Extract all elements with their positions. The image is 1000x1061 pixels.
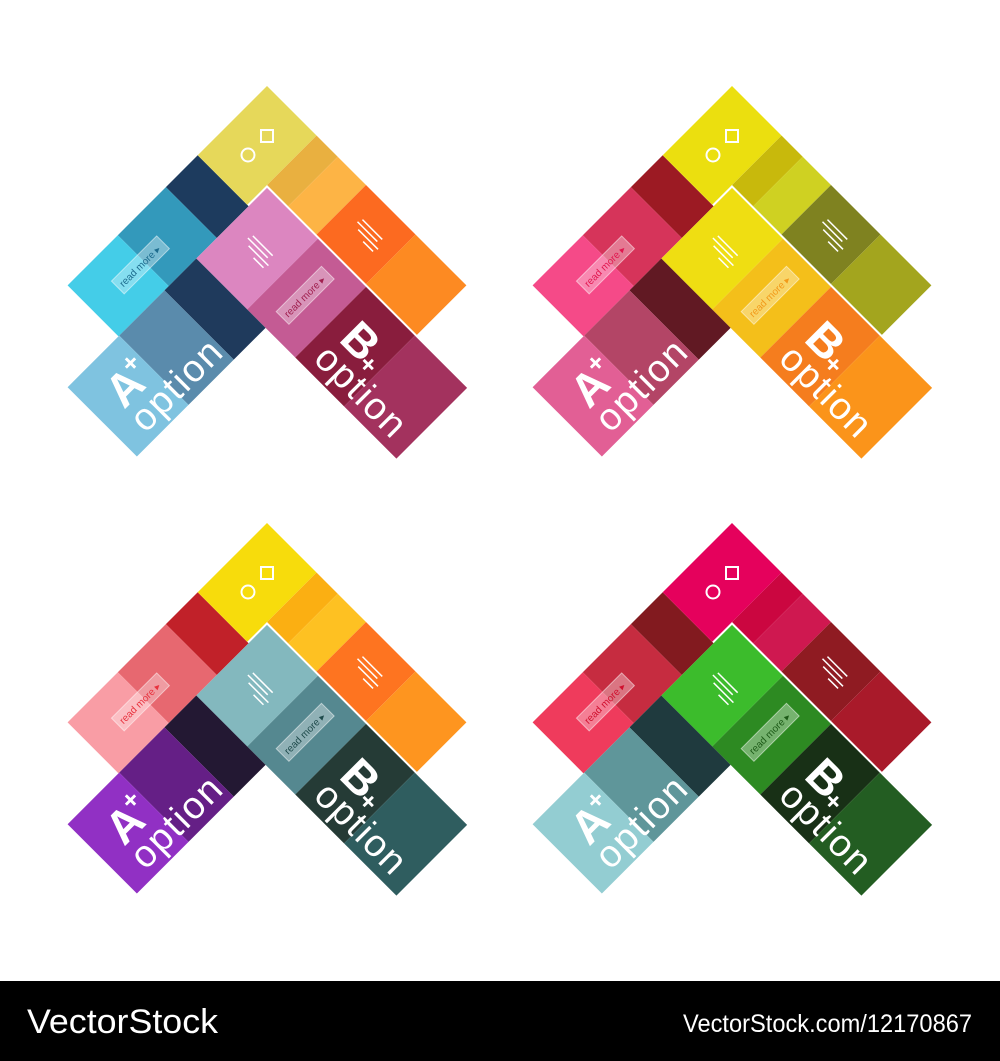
A option text [92,301,231,440]
read more button left: read more ▸ [583,244,628,290]
A option text: option [122,331,231,440]
B option text: B [331,748,391,808]
panel: bottom-right arrow (red/green/teal) [482,523,983,1024]
read more button B [276,703,334,761]
read more button B: read more ▸ [283,712,328,757]
A option text: option [587,768,696,877]
yellow top square [198,523,316,642]
read more button left: read more ▸ [118,244,163,290]
left arm cells [68,592,249,773]
A option text: + [579,784,611,816]
B band [661,188,932,459]
panel: bottom-left arrow (purple/teal/orange) [17,523,518,1024]
footer bar [0,981,1000,1061]
read more button left [576,673,634,731]
icon: lines on B1 [241,234,275,269]
icon: lines on R3 [815,655,850,690]
read more button left [111,673,169,731]
B option text: B [796,748,856,808]
A option text: A [94,794,155,854]
A option text [557,301,696,440]
right arm cells [732,135,931,335]
A option text: + [579,347,611,379]
left arm cells [533,155,714,336]
A band [68,696,266,894]
read more button B [741,703,799,761]
icon: circle and square [242,567,273,598]
B option text: + [353,348,385,380]
icon: circle and square [242,130,273,162]
B option text: option [306,337,415,446]
B band [196,625,467,896]
yellow top square [663,523,781,642]
icon: lines on B1 [706,234,740,269]
B option text [306,308,444,446]
A option text: A [559,794,620,854]
yellow top square [663,86,781,205]
B option text [771,308,909,446]
icon: lines on B1 [241,671,275,706]
read more button left [576,236,634,294]
B option text [771,745,909,883]
right arm cells [267,135,466,335]
icon: lines on R3 [350,655,385,690]
read more button B: read more ▸ [748,275,793,320]
A option text: + [114,347,146,379]
read more button left: read more ▸ [118,681,163,727]
A option text: A [559,357,620,417]
read more button B [741,266,799,324]
panel: top-right arrow (pink/yellow/olive) [482,86,983,587]
B band [661,625,932,896]
B option text: B [331,311,391,371]
B option text [306,745,444,883]
A band [533,259,731,457]
right arm cells [267,572,466,772]
A option text: option [122,768,231,877]
icon: lines on R3 [815,218,850,253]
B option text: B [796,311,856,371]
read more button B: read more ▸ [748,712,793,757]
B option text: option [771,774,880,883]
A option text: option [587,331,696,440]
A option text: A [94,357,155,417]
footer logo text: VectorStock [27,1003,219,1041]
panel: top-left arrow (blue/pink/orange) [17,86,518,587]
A option text [557,738,696,877]
left arm cells [68,155,249,336]
right arm cells [732,572,931,772]
left arm cells [533,592,714,773]
B option text: + [818,785,850,817]
B band [196,188,467,459]
A option text [92,738,231,877]
A band [533,696,731,894]
B option text: + [818,348,850,380]
A band [68,259,266,457]
footer url text: VectorStock.com/12170867 [683,1010,972,1038]
read more button B: read more ▸ [283,275,328,320]
B option text: + [353,785,385,817]
icon: lines on B1 [706,671,740,706]
B option text: option [306,774,415,883]
read more button left [111,236,169,294]
read more button B [276,266,334,324]
icon: lines on R3 [350,218,385,253]
read more button left: read more ▸ [583,681,628,727]
icon: circle and square [706,567,738,598]
yellow top square [198,86,316,205]
B option text: option [771,337,880,446]
A option text: + [114,784,146,816]
icon: circle and square [706,130,738,162]
